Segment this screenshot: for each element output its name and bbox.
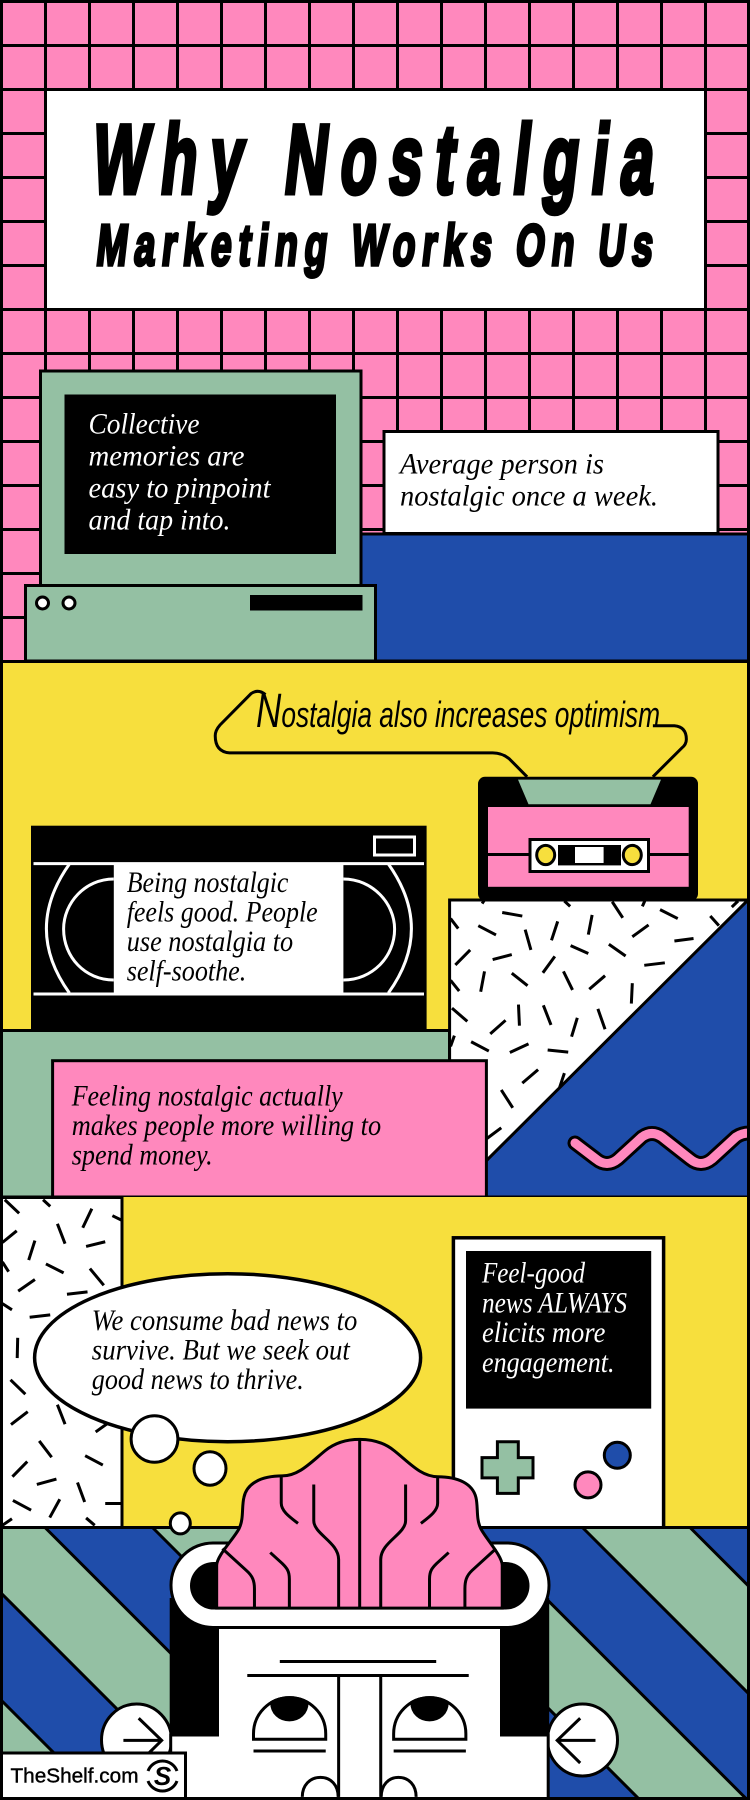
callout: spend money: makes people more willing to: [72, 1109, 381, 1142]
figure: head: [170, 1439, 549, 1800]
hair: [170, 1598, 549, 1735]
cassette tape ribbon: [215, 691, 686, 777]
callout: spend money: spend money.: [72, 1138, 213, 1172]
console text: elicits more: [482, 1316, 605, 1349]
icon: ears with arrows: [102, 1704, 618, 1776]
console text: Feel-good: [481, 1257, 586, 1290]
face features: [247, 1661, 469, 1797]
thought bubble dots: [131, 1416, 226, 1534]
panel: yellow lower section: [0, 1197, 750, 1528]
thought bubble text: [92, 1304, 357, 1396]
logo: TheShelf.com: [2, 1753, 186, 1798]
pink wave: [575, 1133, 749, 1164]
icon: cassette tape: [478, 777, 698, 901]
logo icon: [148, 1761, 177, 1791]
monitor text: and tap into.: [88, 504, 230, 536]
VHS text: Being nostalgic: [127, 866, 288, 899]
panel: green block: [2, 1030, 450, 1197]
eyes: [253, 1698, 466, 1739]
icon: VHS tape: [31, 826, 427, 1030]
thought bubble text: We consume bad news to: [92, 1304, 357, 1337]
icon: game console: [453, 1238, 664, 1528]
console text: news ALWAYS: [482, 1286, 627, 1319]
panel: confetti triangle: [450, 900, 750, 1197]
title line 1: Why Nostalgia: [88, 106, 662, 215]
thought bubble: [35, 1274, 421, 1534]
console buttons: [604, 1442, 630, 1468]
callout: average person: Average person is: [398, 448, 604, 480]
panel: blue block: [360, 534, 750, 661]
console text: engagement.: [482, 1346, 614, 1379]
nostrils: [302, 1777, 416, 1797]
callout: spend money: [53, 1061, 486, 1197]
title box: [46, 90, 706, 310]
VHS text: self-soothe.: [127, 954, 246, 987]
console text: [481, 1257, 627, 1379]
panel: diagonal stripes: [0, 1528, 750, 1800]
title line 2: Marketing Works On Us: [94, 214, 657, 278]
face: [219, 1628, 500, 1800]
monitor text: easy to pinpoint: [88, 472, 271, 504]
VHS text: feels good. People: [127, 895, 318, 928]
skull cavity: [190, 1562, 530, 1610]
monitor text: Collective: [88, 408, 200, 440]
divider line over stripes: [0, 1526, 750, 1529]
brain: [217, 1439, 502, 1608]
callout: average person: [384, 432, 718, 534]
VHS text: [127, 866, 318, 987]
icon: computer monitor: [26, 371, 376, 661]
neck and shoulders: [171, 1735, 548, 1800]
logo icon: S: [154, 1761, 172, 1791]
blue triangle: [486, 900, 750, 1197]
thought bubble text: survive. But we seek out: [92, 1334, 350, 1367]
monitor screen: [64, 394, 336, 554]
skull rim: [171, 1543, 549, 1628]
VHS text: use nostalgia to: [127, 925, 293, 958]
panel: yellow middle section: [2, 662, 748, 1030]
console d-pad: [482, 1442, 533, 1493]
thought bubble text: good news to thrive.: [92, 1363, 304, 1396]
callout: average person: nostalgic once a week.: [400, 480, 658, 512]
computer base: [26, 586, 376, 661]
panel: pink grid header: [0, 0, 750, 662]
logo: TheShelf.com: TheShelf.com: [10, 1766, 138, 1788]
monitor text: [88, 408, 271, 536]
callout: spend money: Feeling nostalgic actually: [71, 1080, 343, 1112]
panel: confetti column: [2, 1198, 122, 1528]
monitor text: memories are: [88, 440, 244, 472]
